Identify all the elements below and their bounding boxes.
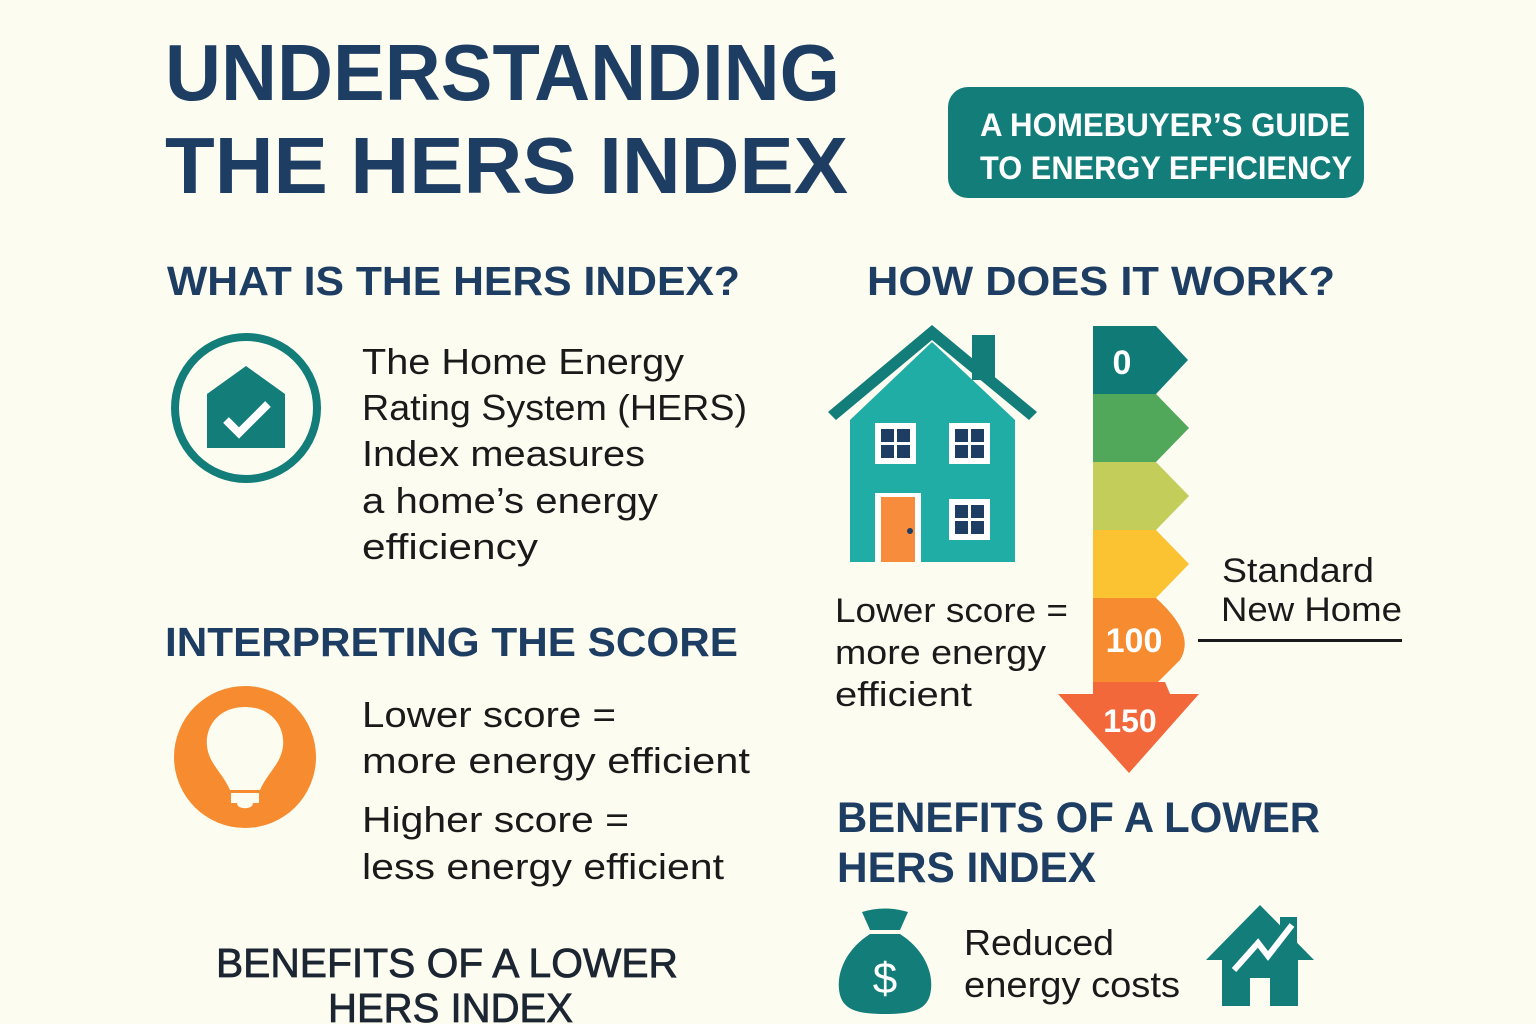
icon: house check circle <box>175 337 317 479</box>
heading: benefits of a lower hers index: BENEFITS OF A LOWER <box>837 794 1320 842</box>
text block: reduced energy costs: Reduced <box>964 922 1114 963</box>
callout: standard new home <box>1198 552 1402 642</box>
heading: benefits of a lower hers index <box>837 794 1320 892</box>
callout: standard new home: Standard <box>1222 552 1374 590</box>
heading: benefits of a lower hers index: HERS INDEX <box>837 844 1096 892</box>
text block: definition: efficiency <box>362 526 538 567</box>
badge: subtitle: A HOMEBUYER’S GUIDE <box>980 107 1350 143</box>
chart: HERS scale arrow <box>1058 326 1199 773</box>
badge: subtitle <box>948 87 1364 198</box>
chart: HERS scale arrow: 0 <box>1113 344 1131 382</box>
chart: HERS scale arrow: 150 <box>1103 703 1157 739</box>
text block: definition: The Home Energy <box>362 341 684 382</box>
text block: score interpretation <box>362 694 750 887</box>
icon: money bag: $ <box>873 954 897 1003</box>
text block: reduced energy costs: energy costs <box>964 964 1180 1005</box>
badge: subtitle: TO ENERGY EFFICIENCY <box>980 150 1352 186</box>
text block: definition <box>362 341 747 567</box>
text block: definition: Index measures <box>362 433 645 474</box>
title <box>165 28 848 210</box>
icon: house with rising chart <box>1206 905 1314 1006</box>
text block: lower score caption: Lower score = <box>835 592 1068 630</box>
text block: score interpretation: Lower score = <box>362 694 616 735</box>
text block: definition: a home’s energy <box>362 480 658 521</box>
chart: HERS scale arrow: 100 <box>1106 622 1162 660</box>
heading: interpreting the score: INTERPRETING THE SCORE <box>165 619 738 665</box>
heading: what is the hers index: WHAT IS THE HERS INDEX? <box>167 258 740 304</box>
icon: house illustration <box>828 325 1037 562</box>
heading: how does it work: HOW DOES IT WORK? <box>867 258 1335 304</box>
title: UNDERSTANDING <box>165 28 840 117</box>
text block: lower score caption: efficient <box>835 676 973 714</box>
text block: score interpretation: more energy efficient <box>362 740 750 781</box>
title: THE HERS INDEX <box>165 121 848 210</box>
text block: lower score caption: more energy <box>835 634 1046 672</box>
icon: light bulb <box>174 686 316 828</box>
heading: benefits (left) <box>216 940 678 1024</box>
text block: score interpretation: Higher score = <box>362 799 629 840</box>
text block: score interpretation: less energy efficient <box>362 846 724 887</box>
heading: benefits (left): BENEFITS OF A LOWER <box>216 940 678 986</box>
callout: standard new home: New Home <box>1221 591 1402 629</box>
icon: money bag <box>839 908 931 1014</box>
text block: lower score caption <box>835 592 1068 714</box>
text block: reduced energy costs <box>964 922 1180 1005</box>
text block: definition: Rating System (HERS) <box>362 387 747 428</box>
